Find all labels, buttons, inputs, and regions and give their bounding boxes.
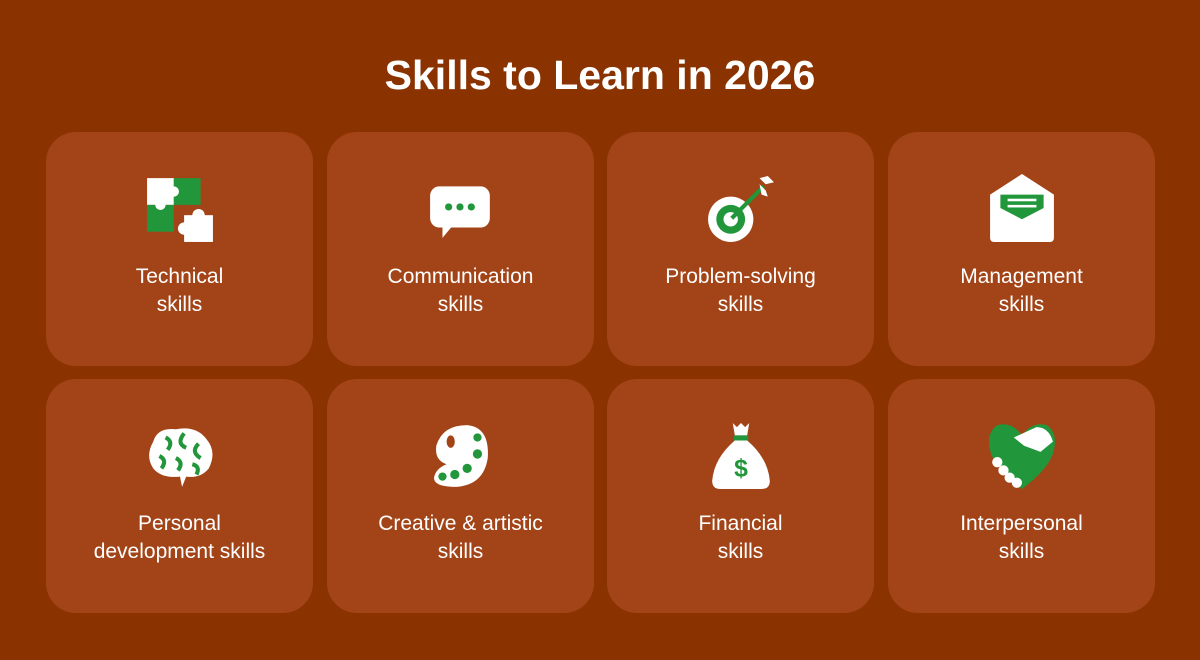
label xyxy=(698,512,783,563)
title: Skills to Learn in 2026 xyxy=(385,52,815,98)
icon: chat bubble xyxy=(430,186,490,238)
label: Interpersonal xyxy=(960,512,1083,535)
label: skills xyxy=(718,293,763,316)
label: skills xyxy=(999,293,1044,316)
icon: palette xyxy=(434,425,488,487)
card: creative & artistic skills xyxy=(327,379,594,613)
label xyxy=(378,512,543,563)
label: Problem-solving xyxy=(665,265,816,288)
label xyxy=(960,512,1083,563)
card: communication skills xyxy=(327,132,594,366)
label: skills xyxy=(438,293,483,316)
label: skills xyxy=(718,540,763,563)
label: Creative & artistic xyxy=(378,512,543,535)
icon: puzzle xyxy=(147,178,213,242)
label: skills xyxy=(438,540,483,563)
label: Management xyxy=(960,265,1083,288)
label: Financial xyxy=(698,512,783,535)
label: Personal xyxy=(138,512,221,535)
card: management skills xyxy=(888,132,1155,366)
icon: money bag: $ xyxy=(734,456,748,483)
label xyxy=(665,265,816,316)
label: skills xyxy=(999,540,1044,563)
icon: handshake heart xyxy=(989,424,1055,489)
card: personal development skills xyxy=(46,379,313,613)
card: problem-solving skills xyxy=(607,132,874,366)
label xyxy=(388,265,533,316)
label xyxy=(94,512,265,563)
label xyxy=(136,265,223,316)
label: Technical xyxy=(136,265,223,288)
card: technical skills xyxy=(46,132,313,366)
label: development skills xyxy=(94,540,265,563)
card: financial skills xyxy=(607,379,874,613)
label xyxy=(960,265,1083,316)
icon: envelope xyxy=(990,174,1054,242)
label: Communication xyxy=(388,265,533,288)
icon: brain xyxy=(149,428,212,487)
label: skills xyxy=(157,293,202,316)
card: interpersonal skills xyxy=(888,379,1155,613)
icon: money bag xyxy=(712,423,770,489)
icon: target xyxy=(708,176,774,242)
